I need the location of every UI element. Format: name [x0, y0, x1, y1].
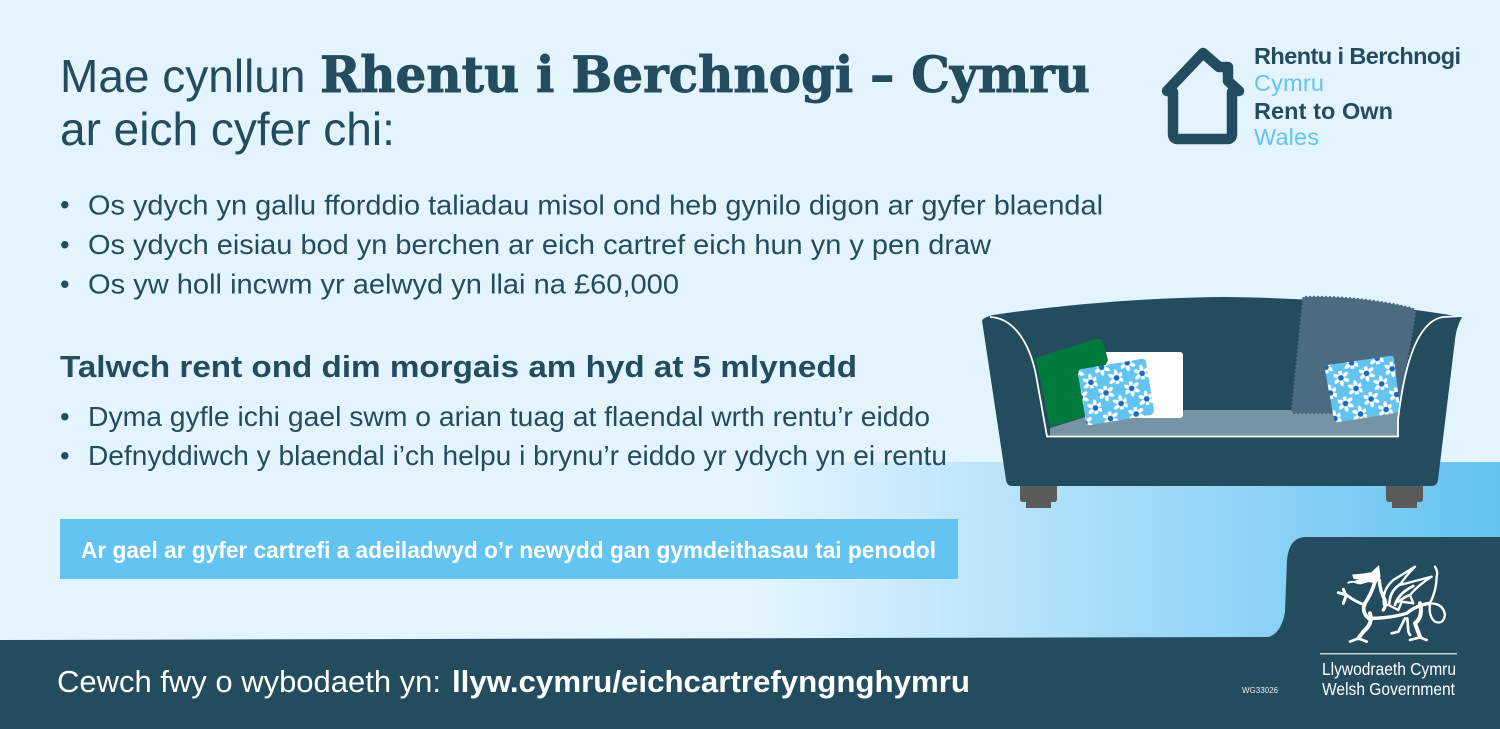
bullet list: deposit: Dyma gyfle ichi gael swm o arian tuag at flaendal wrth rentu’r eiddo	[88, 401, 930, 432]
callout banner	[60, 519, 958, 579]
seat cushion	[1050, 410, 1398, 436]
bullet list: deposit: •	[60, 440, 70, 471]
footer text: llyw.cymru/eichcartrefyngnghymru	[452, 665, 970, 699]
logo text: Llywodraeth Cymru	[1322, 659, 1456, 679]
green cushion	[1035, 339, 1108, 427]
bullet list: eligibility	[60, 189, 1103, 300]
floor gradient	[750, 462, 1500, 642]
bullet list: eligibility: Os yw holl incwm yr aelwyd yn llai na £60,000	[88, 268, 679, 300]
sofa body	[982, 297, 1462, 486]
logo text	[1322, 659, 1456, 699]
title: Mae cynllun	[60, 50, 305, 102]
bullet list: eligibility: •	[60, 268, 70, 300]
Welsh Government logo	[1320, 566, 1457, 699]
reference code: WG33026	[1242, 686, 1279, 695]
logo text: Wales	[1254, 124, 1319, 150]
bullet list: eligibility: Os ydych yn gallu fforddio taliadau misol ond heb gynilo digon ar gyfer blaendal	[88, 190, 1103, 220]
logo text	[1254, 43, 1461, 150]
divider	[1320, 653, 1457, 654]
title: ar eich cyfer chi:	[60, 103, 395, 155]
logo text: Rhentu i Berchnogi	[1254, 43, 1461, 69]
bullet list: deposit: Defnyddiwch y blaendal i’ch helpu i brynu’r eiddo yr ydych yn ei rentu	[88, 440, 947, 471]
footer text: Cewch fwy o wybodaeth yn:	[57, 665, 441, 699]
logo text: Rent to Own	[1254, 98, 1393, 124]
bullet list: deposit: •	[60, 401, 70, 432]
white cushion	[1090, 352, 1183, 418]
illustration: sofa	[982, 297, 1462, 508]
bullet list: deposit	[60, 401, 947, 471]
sofa feet	[1020, 486, 1423, 508]
logo text: Welsh Government	[1322, 679, 1455, 699]
logo: Rhentu i Berchnogi	[1167, 43, 1461, 150]
logo text: Cymru	[1254, 70, 1324, 96]
throw blanket	[1292, 297, 1415, 413]
icon: house	[1167, 53, 1239, 139]
title	[60, 45, 1090, 155]
patterned cushion left	[1078, 359, 1154, 425]
icon: dragon	[1338, 566, 1445, 642]
footer bar	[0, 537, 1500, 729]
bullet list: eligibility: •	[60, 229, 70, 260]
sofa white trim	[990, 316, 1462, 436]
callout banner: Ar gael ar gyfer cartrefi a adeiladwyd o’r newydd gan gymdeithasau tai penodol	[81, 537, 936, 563]
footer text	[57, 665, 970, 699]
subheading: Talwch rent ond dim morgais am hyd at 5 mlynedd	[60, 349, 857, 384]
patterned cushion right	[1325, 356, 1400, 422]
bullet list: eligibility: •	[60, 189, 70, 220]
title: Rhentu i Berchnogi – Cymru	[320, 45, 1090, 104]
bullet list: eligibility: Os ydych eisiau bod yn berchen ar eich cartref eich hun yn y pen draw	[88, 229, 991, 260]
